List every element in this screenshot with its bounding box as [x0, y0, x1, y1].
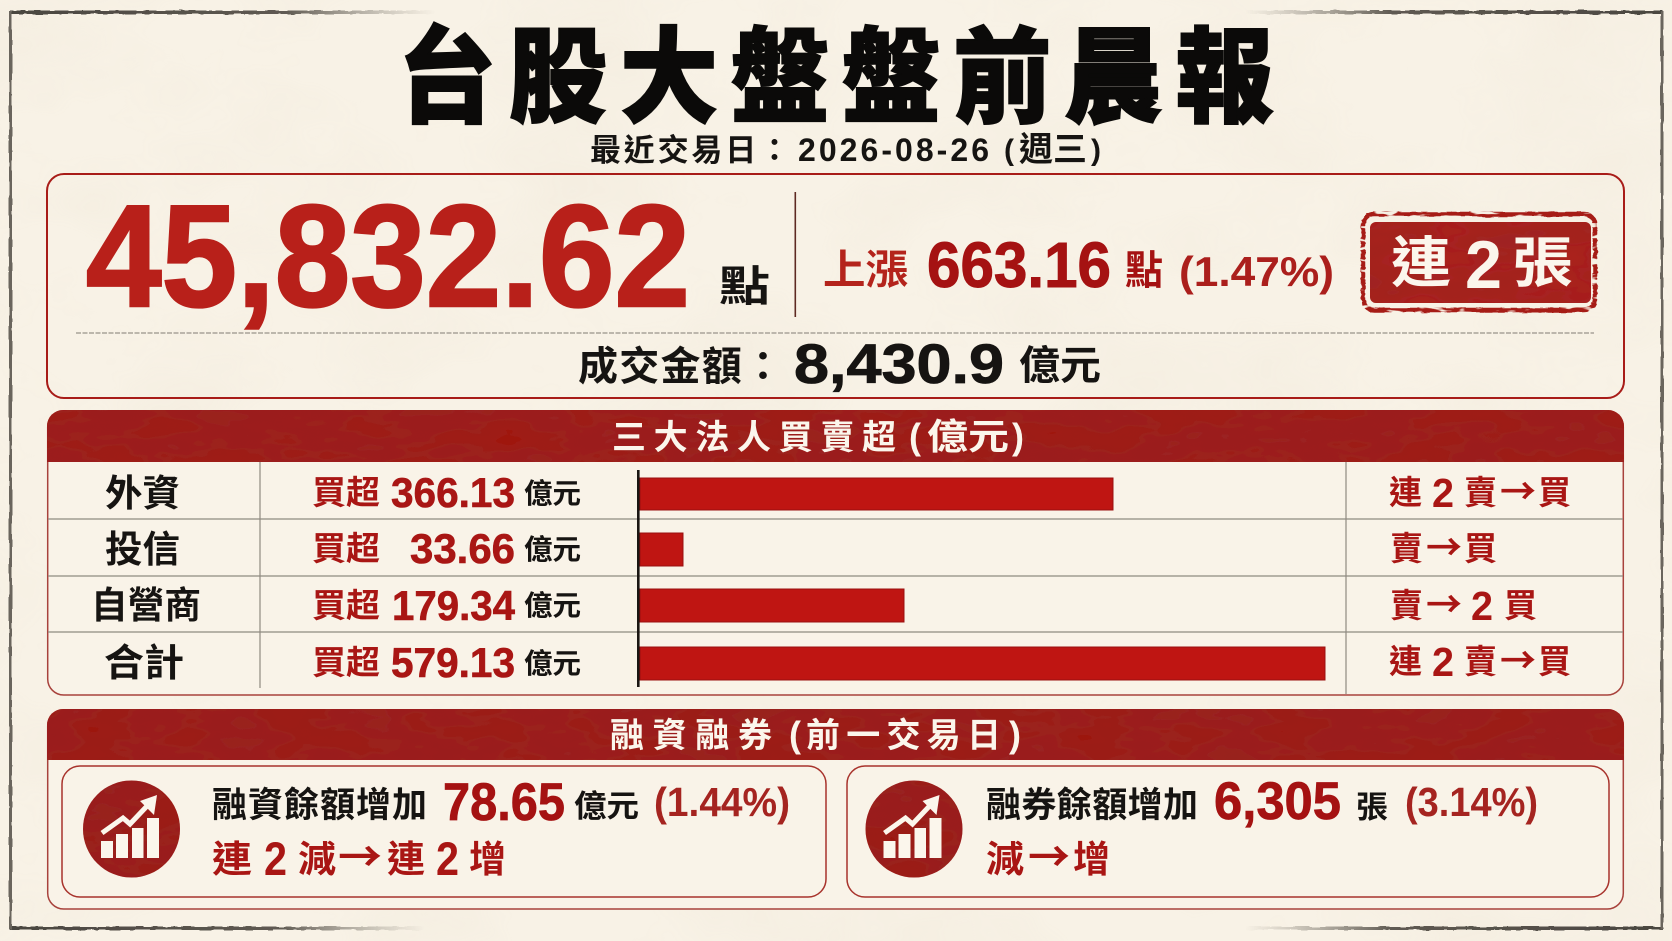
margin trend text: 連	[212, 829, 252, 883]
section header: margin: 融資融券	[610, 708, 772, 757]
row: investment trust: →	[1426, 519, 1462, 571]
change: up points and percent: 上漲	[823, 236, 908, 296]
section header: institutional: 億元	[927, 408, 1009, 460]
short trend text: 減	[986, 829, 1024, 883]
index value: 45,832.62	[86, 175, 690, 337]
section header: institutional: )	[1012, 416, 1024, 457]
row: dealers: 2	[1471, 583, 1493, 629]
row: dealers: 賣	[1390, 579, 1423, 627]
margin trend text: 2	[264, 832, 287, 885]
row: investment trust: 億元	[524, 528, 581, 568]
row: total: 億元	[524, 642, 581, 682]
card: short balance	[847, 766, 1609, 897]
section header: margin: 前一交易日	[806, 708, 1001, 757]
margin trend text: 增	[469, 829, 506, 883]
section header: margin: )	[1009, 714, 1021, 755]
stamp: 2 consecutive rises	[1363, 214, 1595, 310]
row: total: 買超	[312, 636, 380, 684]
change: up points and percent: 663.16	[927, 229, 1111, 301]
icon: rising chart	[83, 780, 180, 878]
row: investment trust: 33.66	[410, 525, 515, 572]
subtitle: latest trading date: 2026-08-26	[798, 132, 989, 168]
section header: margin: (	[789, 714, 801, 755]
row: dealers: 買超	[312, 579, 380, 627]
row: foreign investors: 366.13	[391, 469, 515, 516]
stamp: 2 consecutive rises: 2	[1465, 227, 1502, 303]
panel: index summary	[47, 174, 1624, 398]
index unit: 點	[719, 253, 770, 314]
row: total: →	[1500, 632, 1536, 684]
row: investment trust: 投信	[105, 519, 180, 573]
vertical divider	[794, 192, 796, 317]
row: total	[104, 632, 1571, 687]
subtitle: latest trading date: )	[1091, 134, 1101, 167]
row: dealers: 買	[1504, 579, 1537, 627]
short balance text: (3.14%)	[1405, 779, 1538, 825]
margin trend text: 減	[298, 829, 336, 883]
short balance text: 6,305	[1214, 772, 1341, 831]
row: foreign investors	[105, 463, 1571, 517]
section header: institutional	[47, 408, 1624, 462]
row: total: 賣	[1464, 635, 1497, 683]
short trend text: →	[1028, 824, 1070, 885]
row: foreign investors: →	[1500, 463, 1536, 515]
card: margin balance	[62, 766, 826, 897]
row: foreign investors: 連	[1389, 466, 1422, 514]
subtitle: latest trading date: 最近交易日：	[590, 125, 790, 170]
turnover	[578, 332, 1101, 395]
stamp: 2 consecutive rises: 連	[1391, 218, 1451, 298]
row: foreign investors: 外資	[105, 463, 180, 517]
row: total: 579.13	[391, 639, 515, 686]
change: up points and percent: 點	[1125, 238, 1163, 296]
change: up points and percent	[823, 229, 1334, 301]
row: investment trust: 買	[1464, 522, 1497, 570]
margin trend text	[212, 824, 506, 885]
section header: institutional: 三大法人買賣超	[612, 410, 896, 459]
short balance text: 張	[1356, 782, 1388, 827]
row: total: 2	[1432, 639, 1454, 685]
row: dealers: 179.34	[392, 582, 516, 629]
margin balance text: 億元	[574, 781, 639, 826]
subtitle: latest trading date: 週三	[1019, 122, 1087, 171]
section header: institutional: (	[909, 416, 921, 457]
short trend text: 增	[1073, 829, 1110, 883]
row: dealers	[91, 575, 1537, 629]
row: investment trust: 賣	[1390, 522, 1423, 570]
section header: margin	[47, 708, 1624, 760]
row: foreign investors: 2	[1432, 470, 1454, 516]
subtitle: latest trading date	[590, 122, 1101, 171]
row: total: 合計	[104, 632, 184, 687]
row: foreign investors: 億元	[524, 472, 581, 512]
margin trend text: →	[338, 824, 382, 885]
row: foreign investors: 買	[1538, 466, 1571, 514]
short balance text	[986, 772, 1538, 831]
margin balance text	[212, 773, 790, 832]
short trend text	[986, 824, 1110, 885]
turnover: 億元	[1019, 333, 1101, 391]
row: foreign investors: 賣	[1464, 466, 1497, 514]
row: dealers: 自營商	[91, 575, 201, 629]
margin balance text: 78.65	[443, 773, 565, 832]
panel: institutional net buy table	[47, 408, 1624, 695]
dashed divider	[76, 332, 1594, 334]
icon: rising chart	[866, 780, 962, 878]
short balance text: 融券餘額增加	[986, 777, 1198, 828]
bar chart axis	[637, 470, 640, 687]
turnover: 成交金額：	[578, 334, 783, 392]
margin trend text: 2	[436, 832, 459, 885]
row: dealers: →	[1426, 576, 1462, 628]
panel: margin trading	[47, 708, 1624, 909]
subtitle: latest trading date: (	[1004, 134, 1014, 167]
row: dealers: 億元	[524, 584, 581, 624]
row: foreign investors: 買超	[312, 466, 380, 514]
table grid lines	[48, 462, 1623, 694]
margin balance text: 融資餘額增加	[212, 777, 427, 828]
margin trend text: 連	[387, 829, 425, 883]
row: total: 買	[1538, 635, 1571, 683]
row: investment trust	[105, 519, 1497, 573]
turnover: 8,430.9	[794, 332, 1004, 395]
change: up points and percent: (1.47%)	[1179, 248, 1334, 295]
stamp: 2 consecutive rises: 張	[1512, 218, 1573, 298]
row: investment trust: 買超	[312, 522, 380, 570]
margin balance text: (1.44%)	[654, 779, 790, 825]
row: total: 連	[1389, 635, 1422, 683]
